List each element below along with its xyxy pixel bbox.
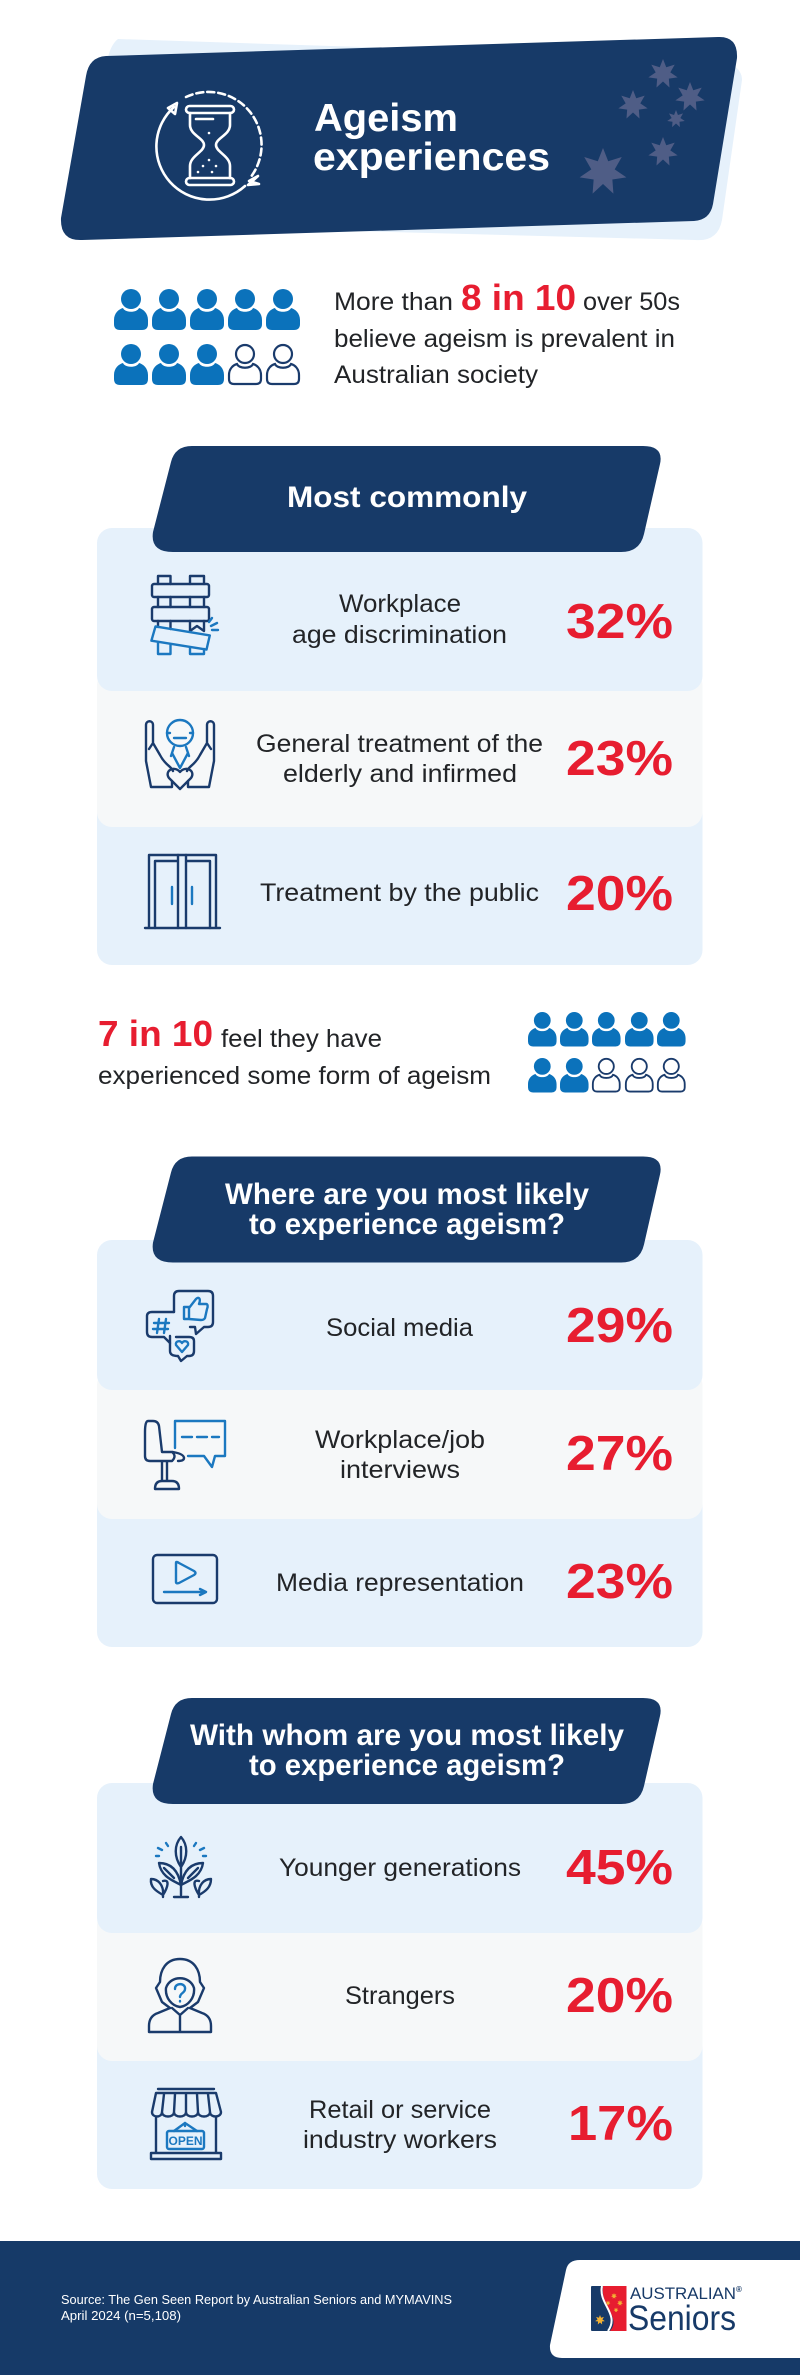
value: 32% — [566, 595, 673, 649]
stat text: 7 in 10: experienced some form of ageism — [98, 1062, 491, 1090]
row: general treatment — [146, 720, 673, 789]
stat text: 8 in 10: More than — [334, 288, 453, 316]
value: 45% — [566, 1841, 673, 1895]
heading: with whom: to experience ageism? — [249, 1749, 565, 1782]
label: Younger generations — [279, 1854, 521, 1882]
value: 23% — [566, 1555, 673, 1609]
row: treatment by the public — [145, 855, 673, 928]
row: media representation — [153, 1555, 673, 1609]
source note: April 2024 (n=5,108) — [61, 2308, 181, 2323]
stat text: 8 in 10: believe ageism is prevalent in — [334, 325, 675, 353]
value: 27% — [566, 1427, 673, 1481]
value: 20% — [566, 1969, 673, 2023]
label: Retail or service — [309, 2096, 491, 2124]
label line two: industry workers — [303, 2126, 497, 2154]
row: social media — [147, 1291, 673, 1361]
heading: most commonly: Most commonly — [287, 481, 527, 514]
logo: australian seniors: AUSTRALIAN — [630, 2284, 736, 2303]
stat text: 8 in 10: 8 in 10 — [461, 277, 576, 318]
label line two: age discrimination — [292, 621, 507, 649]
label: General treatment of the — [256, 730, 543, 758]
icon: open shop: OPEN — [168, 2134, 203, 2148]
panel: most commonly — [97, 446, 702, 965]
heading: where: Where are you most likely — [225, 1178, 589, 1211]
icon: southern cross stars — [580, 59, 705, 194]
icon: broken fence — [151, 576, 218, 654]
label: Workplace — [339, 590, 461, 618]
label: Strangers — [345, 1982, 455, 2010]
label: Media representation — [276, 1569, 524, 1597]
stat text: 7 in 10 — [98, 1013, 491, 1090]
heading: most commonly — [153, 446, 661, 552]
stat text: 8 in 10 — [334, 277, 680, 389]
row: retail or service — [151, 2089, 673, 2159]
label line two: interviews — [340, 1456, 460, 1484]
row: strangers — [149, 1959, 673, 2032]
icon: social bubbles — [147, 1291, 213, 1361]
row: younger generations — [151, 1837, 673, 1897]
title — [313, 97, 550, 179]
value: 23% — [566, 732, 673, 786]
banner shape — [61, 37, 737, 240]
row: workplace age discrimination — [151, 576, 673, 654]
stat text: 8 in 10: over 50s — [583, 288, 680, 316]
value: 17% — [568, 2097, 673, 2151]
label: Workplace/job — [315, 1426, 485, 1454]
people pictogram: 7 in 10 — [528, 1012, 686, 1092]
icon: elderly person in caring hands — [146, 720, 214, 789]
source note — [61, 2292, 452, 2323]
stat text: 8 in 10: Australian society — [334, 361, 539, 389]
logo: australian seniors — [591, 2284, 742, 2338]
label line two: elderly and infirmed — [283, 760, 517, 788]
heading: with whom: With whom are you most likely — [190, 1719, 624, 1752]
logo tab — [550, 2260, 800, 2358]
source note: Source: The Gen Seen Report by Australian Seniors and MYMAVINS — [61, 2292, 452, 2307]
value: 20% — [566, 867, 673, 921]
logo: australian seniors: ® — [736, 2285, 742, 2294]
icon: hourglass with circular arrows — [156, 92, 262, 200]
icon: chair and speech bubble — [145, 1421, 225, 1489]
people pictogram: 8 in 10 — [114, 289, 300, 385]
icon: double doors — [145, 855, 220, 928]
panel: where — [97, 1156, 702, 1647]
icon: hooded stranger — [149, 1959, 211, 2032]
logo: australian seniors: Seniors — [628, 2299, 736, 2338]
value: 29% — [566, 1299, 673, 1353]
icon: open shop — [151, 2089, 221, 2159]
title: experiences — [313, 136, 550, 179]
row: workplace/job interviews — [145, 1421, 673, 1489]
stat text: 7 in 10: feel they have — [221, 1025, 382, 1053]
icon: video player — [153, 1555, 217, 1603]
stat text: 7 in 10: 7 in 10 — [98, 1013, 213, 1054]
title: Ageism — [314, 97, 458, 140]
label: Treatment by the public — [260, 879, 539, 907]
icon: sprouting plant — [151, 1837, 211, 1897]
panel: with whom — [97, 1698, 702, 2189]
header banner — [61, 37, 742, 240]
label: Social media — [326, 1314, 473, 1342]
heading: where: to experience ageism? — [249, 1208, 565, 1241]
heading: where — [153, 1156, 661, 1262]
heading: with whom — [153, 1698, 661, 1804]
footer band — [0, 2241, 800, 2375]
